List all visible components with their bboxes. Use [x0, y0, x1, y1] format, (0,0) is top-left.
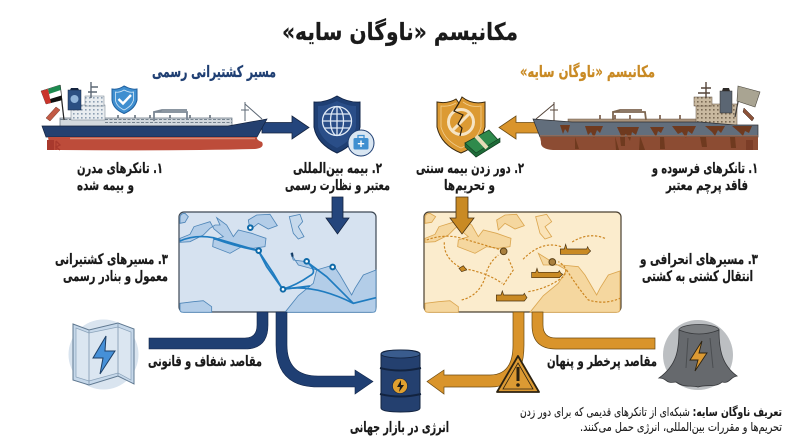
icon: broken shield and cash	[437, 97, 500, 157]
text: step 2 international insurance	[285, 161, 390, 194]
arrow: shadow tanker to broken insurance	[499, 116, 545, 139]
arrow: evasion down to shadow map	[450, 197, 474, 234]
text: step 2 evading insurance	[416, 161, 524, 194]
icon: transparent map	[68, 320, 138, 390]
text: step 2 international insurance: معتبر و نظارت رسمی	[285, 178, 390, 194]
text: step 1 worn tankers	[651, 161, 758, 194]
arrow: shadow map to hidden destinations	[532, 312, 655, 349]
map: official routes	[179, 212, 376, 312]
text: step 3 diverted routes: انتقال کشتی به کشتی	[642, 269, 753, 285]
arrow: modern tanker to insurance	[262, 116, 309, 139]
text: step 1 modern tankers: و بیمه شده	[77, 178, 134, 194]
text: step 3 diverted routes	[639, 252, 758, 285]
text: step 1 modern tankers	[77, 161, 163, 194]
icon: insured check shield	[112, 86, 137, 114]
text: step 1 worn tankers: فاقد پرچم معتبر	[665, 178, 748, 194]
text: step 2 evading insurance: و تحریم‌ها	[444, 178, 495, 194]
arrow: insurance down to official map	[326, 197, 349, 234]
icon: rusty shadow tanker	[533, 82, 760, 150]
text: transparent destinations: مقاصد شفاف و قانونی	[148, 354, 262, 370]
text: step 2 international insurance: ۲. بیمه بین‌المللی	[293, 161, 382, 177]
icon: cash stack	[465, 130, 500, 157]
text: step 3 official routes: معمول و بنادر رسمی	[63, 269, 168, 285]
arrow: shadow map to barrel	[427, 312, 524, 394]
arrow: official map to barrel	[276, 312, 373, 394]
text: step 3 official routes	[55, 252, 168, 285]
map: shadow routes	[424, 212, 621, 312]
text: step 1 modern tankers: ۱. تانکرهای مدرن	[77, 161, 163, 177]
text: step 1 worn tankers: ۱. تانکرهای فرسوده و	[651, 161, 758, 177]
heading: shadow fleet mechanism: مکانیسم «ناوگان سایه»	[520, 62, 655, 81]
text: step 3 official routes: ۳. مسیرهای کشتیرانی	[55, 252, 168, 268]
icon: oil barrel	[380, 350, 421, 412]
icon: modern insured tanker	[41, 82, 267, 150]
text: shadow fleet definition	[520, 405, 782, 435]
icon: international insurance shield with globe	[314, 96, 374, 156]
icon: UAE flag	[41, 85, 64, 120]
text: risky hidden destinations: مقاصد پرخطر و پنهان	[547, 354, 657, 370]
text: step 2 evading insurance: ۲. دور زدن بیمه سنتی	[416, 161, 524, 177]
text: step 3 diverted routes: ۳. مسیرهای انحرافی و	[639, 252, 758, 268]
icon: warning triangle	[497, 356, 539, 392]
text: energy in global market: انرژی در بازار جهانی	[350, 420, 449, 436]
title: مکانیسم «ناوگان سایه»	[282, 18, 518, 46]
icon: covered energy	[659, 320, 737, 390]
arrow: official map to transparent destinations	[149, 312, 268, 349]
heading: official shipping route: مسیر کشتیرانی رسمی	[152, 62, 276, 81]
